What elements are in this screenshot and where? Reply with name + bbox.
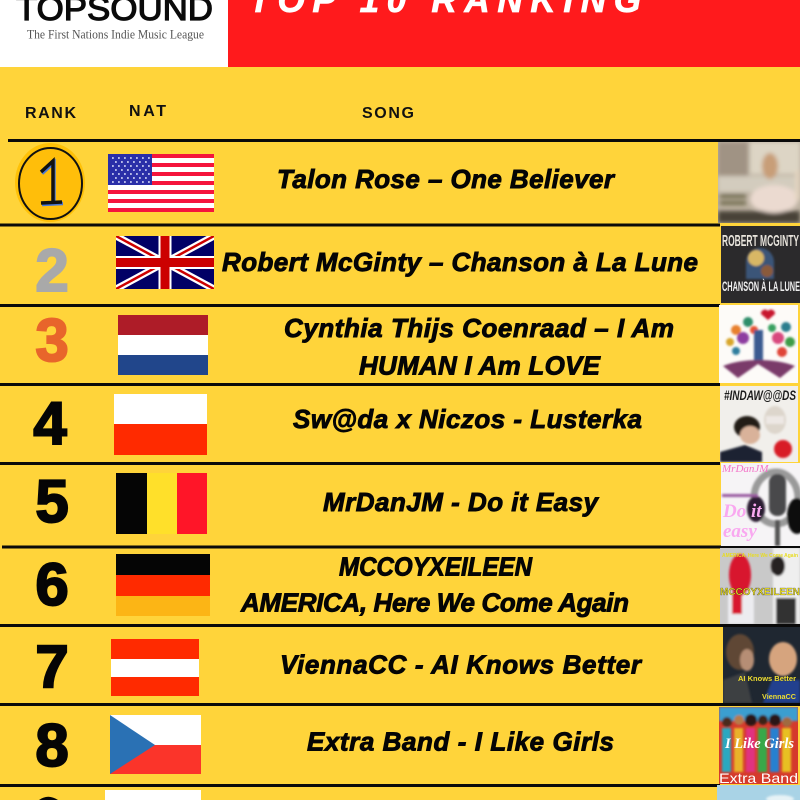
song 7: ViennaCC - AI Knows Better — [280, 650, 643, 680]
rank 4: 4 — [33, 390, 67, 457]
album art 1 — [718, 142, 800, 223]
album art 8 — [719, 707, 798, 786]
song 6 — [240, 552, 629, 618]
song 2: Robert McGinty – Chanson à La Lune — [222, 247, 698, 277]
column headings: NAT — [129, 103, 166, 120]
rank 6: 6 — [35, 551, 69, 618]
song 5: MrDanJM - Do it Easy — [323, 487, 600, 517]
flag: USA — [108, 154, 214, 212]
column headings: SONG — [362, 105, 414, 122]
column headings: RANK — [25, 105, 76, 122]
album art 3 — [719, 305, 798, 383]
album art 2 — [721, 226, 800, 303]
rank 7: 7 — [35, 633, 69, 700]
rank 8: 8 — [35, 712, 69, 779]
flag: Germany — [116, 554, 210, 616]
album art 6 — [720, 548, 800, 624]
flag: Netherlands — [118, 315, 208, 375]
album art 4 — [720, 386, 798, 462]
album art 7: AI Knows Better — [738, 674, 796, 683]
album art 8: Extra Band — [719, 770, 798, 786]
flag: Austria — [111, 639, 199, 696]
song 3 — [284, 313, 674, 380]
header panel — [0, 0, 800, 67]
song 6: MCCOYXEILEEN — [339, 552, 533, 582]
rank 3: 3 — [35, 307, 69, 374]
album art 6: AMERICA, Here We Come Again — [722, 553, 798, 559]
album art 5: MrDanJM — [721, 463, 769, 475]
album art 5 — [721, 463, 800, 546]
album art 5: Do it — [722, 501, 762, 522]
song 3: HUMAN I Am LOVE — [359, 350, 601, 380]
rank 9 sliver: only the top edge shows at the crop — [39, 797, 58, 800]
rank 2: 2 — [35, 237, 69, 304]
flag: row 9 (cropped) — [105, 790, 201, 800]
song 6: AMERICA, Here We Come Again — [240, 588, 629, 618]
flag: Poland — [114, 394, 207, 455]
song 8: Extra Band - I Like Girls — [307, 726, 614, 756]
rank 5: 5 — [35, 468, 69, 535]
flag: Belgium — [116, 473, 207, 534]
rank 1 badge — [15, 143, 85, 222]
album art 9 (cropped) — [717, 785, 800, 800]
flag: Czech Republic — [110, 715, 201, 774]
album art 8: I Like Girls — [724, 736, 794, 752]
song 3: Cynthia Thijs Coenraad – I Am — [284, 313, 674, 343]
column headings — [25, 103, 414, 122]
album art 5: easy — [723, 521, 757, 542]
album art 7 — [723, 627, 800, 703]
album art 7: ViennaCC — [762, 694, 796, 701]
song 1: Talon Rose – One Believer — [277, 164, 616, 194]
tagline: The First Nations Indie Music League — [27, 28, 204, 42]
song 4: Sw@da x Niczos - Lusterka — [293, 404, 642, 434]
flag: UK — [116, 236, 214, 289]
